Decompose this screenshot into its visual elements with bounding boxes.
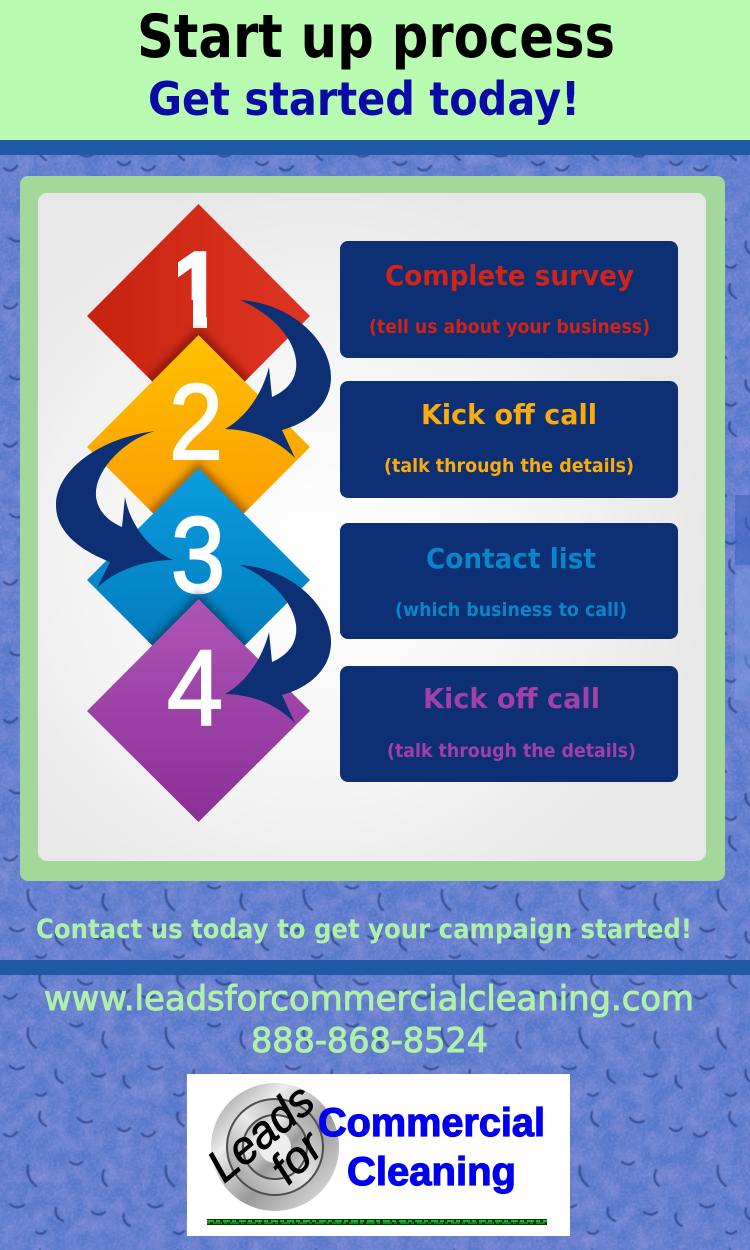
number 4: 4	[167, 627, 223, 748]
step 3 diamond	[87, 468, 310, 692]
step 2 label box	[340, 381, 678, 498]
call to action: Contact us today to get your campaign started!	[36, 914, 692, 945]
panel: process steps	[20, 176, 725, 881]
title: Start up process	[137, 2, 615, 72]
header divider bar	[0, 140, 750, 155]
panel: green frame	[20, 176, 725, 881]
number 2: 2	[169, 361, 223, 482]
arrow: step 1 to step 2	[225, 300, 331, 458]
number 3: 3	[171, 494, 225, 615]
logo script: for: for	[261, 1120, 334, 1193]
shadow under step 3	[146, 458, 250, 514]
phone number: 888-868-8524	[251, 1021, 488, 1061]
step 1 heading: Complete survey	[385, 259, 634, 292]
step 4 diamond	[87, 599, 310, 822]
step 3 label box	[340, 523, 678, 639]
shadow under step 2	[146, 324, 251, 382]
step 4 description: (talk through the details)	[387, 740, 636, 762]
step 1 diamond	[87, 204, 310, 382]
step 3 heading: Contact list	[426, 542, 596, 575]
footer divider bar	[0, 960, 750, 975]
logo background	[187, 1074, 570, 1236]
website: www.leadsforcommercialcleaning.com	[44, 979, 694, 1019]
step 4 label box	[340, 666, 678, 782]
logo green underline	[207, 1219, 547, 1225]
step 2 description: (talk through the details)	[384, 455, 634, 477]
arrow: step 2 to step 3	[56, 431, 173, 588]
logo	[187, 1073, 570, 1236]
step 2 heading: Kick off call	[421, 398, 597, 431]
number 1: 1	[167, 230, 227, 351]
arrow: step 3 to step 4	[225, 565, 331, 723]
step 1 label box	[340, 241, 678, 358]
step 4 heading: Kick off call	[423, 682, 600, 715]
shadow under step 4	[146, 588, 251, 646]
logo wordmark: Commercial: Commercial	[318, 1101, 545, 1145]
icon: silver target disc	[211, 1083, 339, 1211]
step 2 diamond	[87, 335, 310, 559]
logo script: Leads: Leads	[197, 1073, 324, 1192]
panel: light inner card	[38, 193, 706, 861]
step 1 description: (tell us about your business)	[369, 316, 650, 338]
header band	[0, 0, 750, 140]
logo wordmark: Cleaning: Cleaning	[347, 1150, 516, 1194]
step 3 description: (which business to call)	[395, 599, 627, 621]
subtitle: Get started today!	[148, 72, 580, 126]
